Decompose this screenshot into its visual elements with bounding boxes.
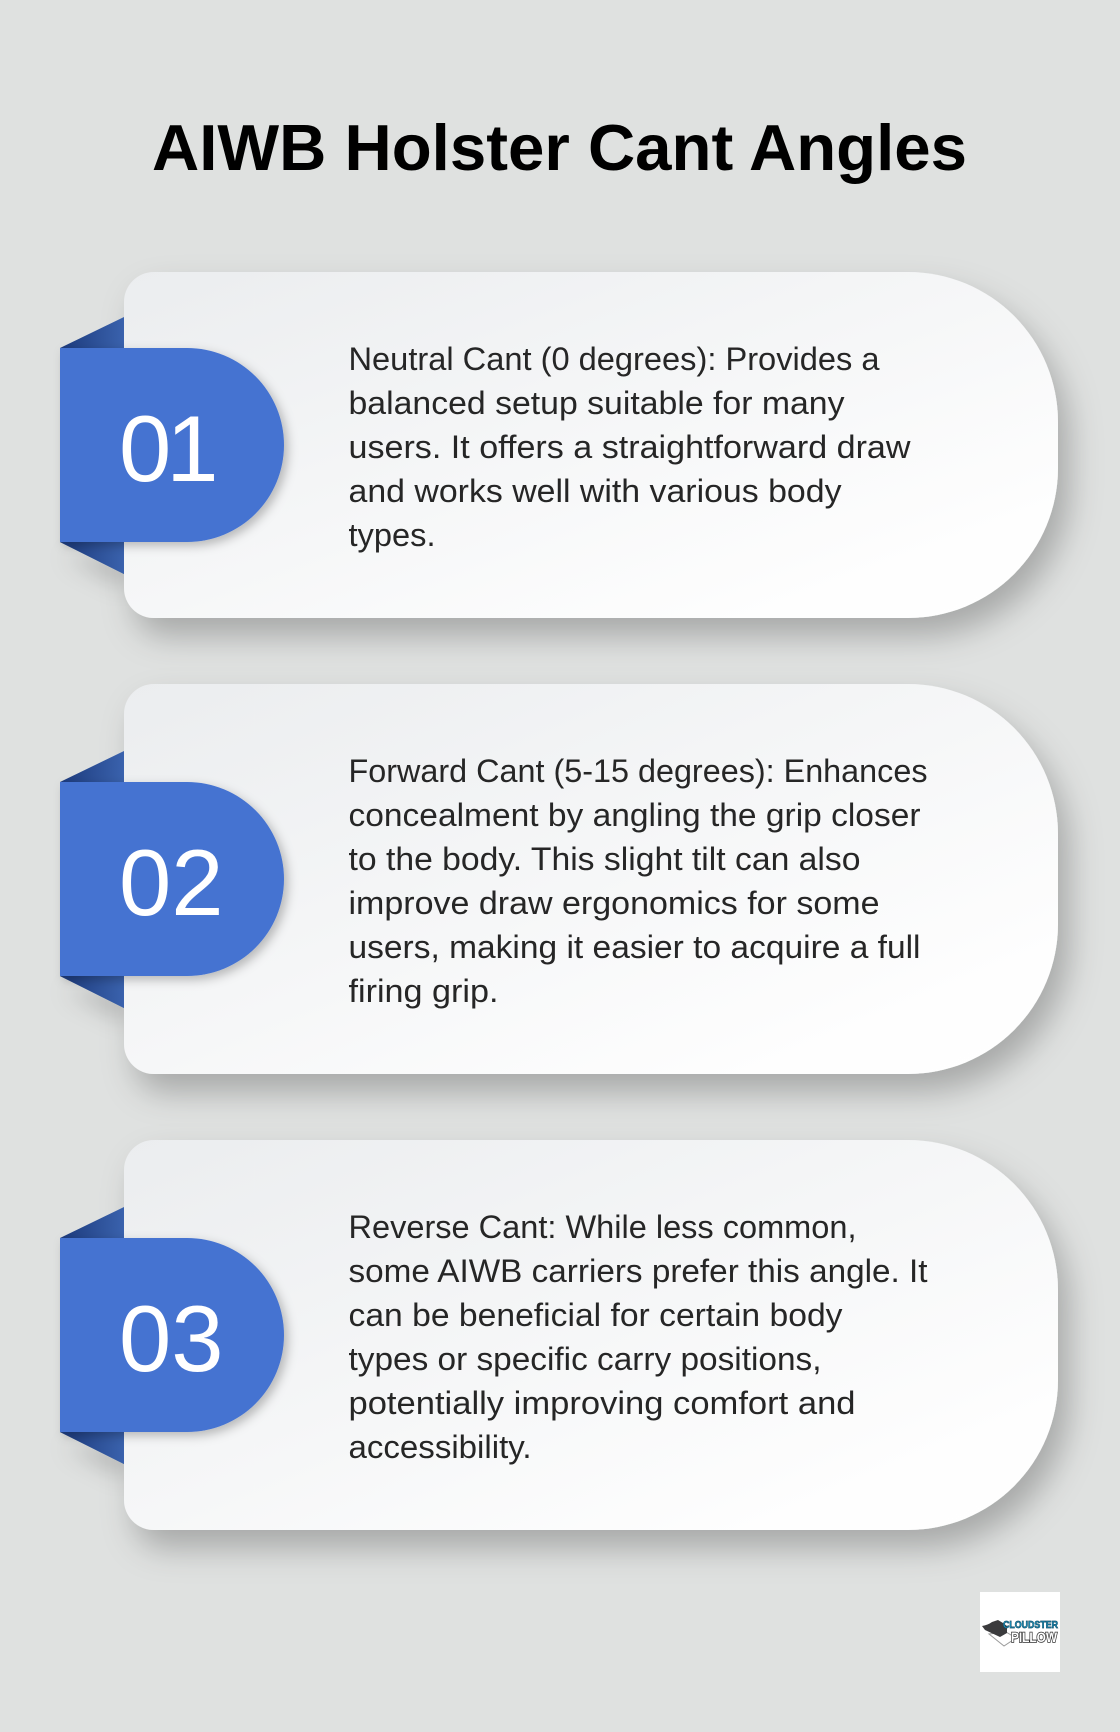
description text: potentially improving comfort and xyxy=(348,1385,856,1421)
ribbon fold top xyxy=(60,751,124,782)
number badge xyxy=(60,348,284,542)
description text xyxy=(348,341,911,553)
ribbon fold bottom xyxy=(60,976,124,1008)
description text: types or specific carry positions, xyxy=(348,1341,822,1377)
panel: step 01 neutral cant xyxy=(60,272,1058,618)
description text: types. xyxy=(348,517,436,553)
logo wordmark: CLOUDSTER xyxy=(1003,1619,1058,1631)
card background xyxy=(124,684,1058,1074)
panel: step 03 reverse cant xyxy=(60,1140,1058,1530)
ribbon fold shadow xyxy=(60,976,124,1008)
description text: some AIWB carriers prefer this angle. It xyxy=(348,1253,928,1289)
description text: and works well with various body xyxy=(348,473,842,509)
description text xyxy=(348,1209,928,1465)
card background xyxy=(124,1140,1058,1530)
number 03: 03 xyxy=(119,1286,224,1391)
description text: firing grip. xyxy=(348,973,498,1009)
number badge xyxy=(60,1238,284,1432)
description text: improve draw ergonomics for some xyxy=(348,885,880,921)
logo background xyxy=(980,1592,1060,1672)
description text: balanced setup suitable for many xyxy=(348,385,844,421)
number badge xyxy=(60,782,284,976)
description text xyxy=(348,753,928,1009)
logo wordmark: PILLOW xyxy=(1011,1629,1058,1645)
ribbon fold shadow xyxy=(60,542,124,574)
description text: Reverse Cant: While less common, xyxy=(348,1209,856,1245)
number 02: 02 xyxy=(119,830,224,935)
description text: can be beneficial for certain body xyxy=(348,1297,842,1333)
icon: pillow xyxy=(982,1620,1016,1646)
number 01: 01 xyxy=(119,396,214,501)
description text: to the body. This slight tilt can also xyxy=(348,841,860,877)
description text: users, making it easier to acquire a full xyxy=(348,929,920,965)
panel: step 02 forward cant xyxy=(60,684,1058,1074)
title: AIWB Holster Cant Angles xyxy=(152,111,967,184)
ribbon fold shadow xyxy=(60,1432,124,1464)
logo: Cloudster Pillow xyxy=(980,1592,1060,1672)
description text: Neutral Cant (0 degrees): Provides a xyxy=(348,341,880,377)
description text: Forward Cant (5-15 degrees): Enhances xyxy=(348,753,928,789)
ribbon fold top xyxy=(60,1207,124,1238)
ribbon fold bottom xyxy=(60,542,124,574)
description text: accessibility. xyxy=(348,1429,532,1465)
card background xyxy=(124,272,1058,618)
description text: concealment by angling the grip closer xyxy=(348,797,921,833)
ribbon fold top xyxy=(60,317,124,348)
ribbon fold bottom xyxy=(60,1432,124,1464)
logo wordmark xyxy=(1003,1619,1058,1645)
description text: users. It offers a straightforward draw xyxy=(348,429,911,465)
